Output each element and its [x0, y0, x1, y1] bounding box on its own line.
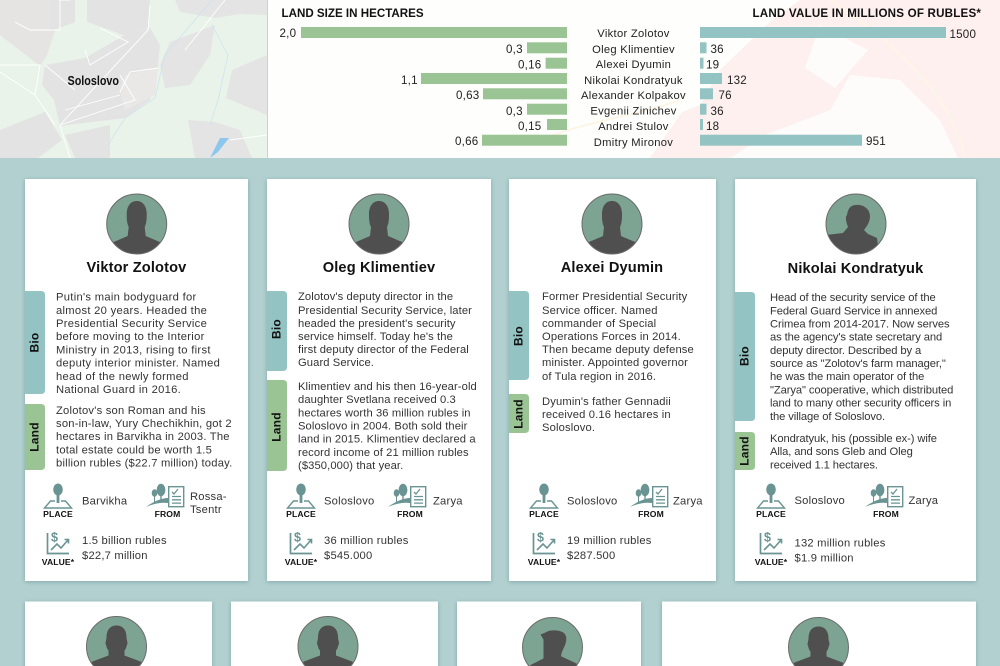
land text: hectares in Barvikha in 2003. The — [56, 431, 230, 443]
panel: chart background — [267, 0, 1000, 158]
land tab: Land — [512, 399, 526, 429]
bio text: Ministry in 2013, rising to first — [56, 344, 211, 356]
portrait — [107, 194, 167, 254]
name: Nikolai Kondratyuk — [788, 261, 924, 277]
row: Kolpakov: 0,63 — [456, 89, 479, 102]
portrait — [826, 194, 886, 254]
from — [865, 484, 939, 519]
from: FROM — [638, 509, 664, 519]
bio tab: Bio — [512, 326, 526, 346]
land text: land in 2015. Klimentiev declared a — [298, 434, 476, 446]
row: Zinichev: Evgenii Zinichev — [590, 106, 677, 118]
portrait — [349, 194, 409, 254]
bio tab: Bio — [270, 319, 284, 339]
from — [388, 484, 463, 519]
land text: total estate could be worth 1.5 — [56, 444, 212, 456]
value: $287.500 — [567, 550, 615, 562]
from: Rossa- — [190, 491, 227, 503]
row: Kondratyuk: 132 — [727, 74, 747, 87]
row: Zolotov: Viktor Zolotov — [597, 28, 670, 40]
bio text: the village of Soloslovo. — [770, 411, 885, 423]
panel: Viktor Zolotov — [25, 179, 248, 581]
land text — [770, 433, 937, 472]
bio text: Then became deputy defense — [542, 344, 694, 356]
bio text: he was the main operator of the — [770, 371, 924, 383]
bio text: of Tula region in 2016. — [542, 371, 656, 383]
row: Dyumin: Alexei Dyumin — [596, 59, 671, 71]
value: VALUE* — [528, 557, 561, 567]
place: Soloslovo — [567, 496, 618, 508]
value: $22,7 million — [82, 550, 148, 562]
bio text: minister. Appointed governor — [542, 357, 688, 369]
value — [42, 530, 167, 567]
land tab — [509, 394, 529, 433]
row: Kondratyuk — [401, 73, 747, 87]
heading: land size: LAND SIZE IN HECTARES — [282, 7, 424, 20]
value: 1.5 billion rubles — [82, 535, 167, 547]
value: VALUE* — [285, 557, 318, 567]
bio text: Head of the security service of the — [770, 292, 936, 304]
bio text: "Zarya" cooperative, which distributed — [770, 384, 953, 396]
place: PLACE — [43, 509, 73, 519]
place: PLACE — [286, 509, 316, 519]
bio text: Putin's main bodyguard for — [56, 292, 197, 304]
panel: bar charts — [280, 7, 981, 149]
land text: ($350,000) that year. — [298, 460, 403, 472]
panel: row 2 card 4 — [662, 602, 976, 666]
land text: Soloslovo in 2004. Both sold their — [298, 420, 468, 432]
portrait — [582, 194, 642, 254]
row: Klimentiev: 36 — [710, 43, 724, 56]
bio tab — [735, 292, 755, 421]
bio text: deputy interior minister. Named — [56, 358, 220, 370]
place: PLACE — [756, 509, 786, 519]
panel: row 2 card 3 — [457, 602, 641, 666]
row: Stulov: Andrei Stulov — [598, 121, 669, 133]
bio tab: Bio — [28, 333, 42, 352]
place: Soloslovo — [324, 496, 374, 508]
land text — [542, 396, 671, 434]
panel: Oleg Klimentiev — [267, 179, 491, 581]
row: Stulov — [518, 119, 719, 133]
bio text: before moving to the Interior — [56, 331, 205, 343]
from: Tsentr — [190, 504, 222, 516]
bio text — [298, 291, 472, 369]
row: Mironov: 951 — [866, 135, 886, 148]
row: Kondratyuk: 1,1 — [401, 74, 418, 87]
bio text: deputy director. Described by a — [770, 345, 922, 357]
bio text: Former Presidential Security — [542, 291, 688, 303]
bio text: Presidential Security Service — [56, 318, 207, 330]
bio text: almost 20 years. Headed the — [56, 305, 207, 317]
from: Zarya — [673, 496, 703, 508]
land text: daughter Svetlana received 0.3 — [298, 394, 456, 406]
row: Mironov: Dmitry Mironov — [594, 137, 673, 149]
row: Mironov: 0,66 — [455, 135, 478, 148]
row: Zinichev: 0,3 — [506, 105, 523, 118]
land tab — [267, 380, 287, 471]
place — [756, 484, 845, 519]
land text: hectares worth 36 million rubles in — [298, 408, 471, 420]
row: Stulov: 18 — [706, 120, 719, 133]
bio text — [542, 291, 694, 383]
land tab: Land — [738, 436, 752, 466]
bio text: Service officer. Named — [542, 305, 658, 317]
bio text: Operations Forces in 2014. — [542, 331, 681, 343]
bio text: as the agency's state secretary and — [770, 332, 942, 344]
from: FROM — [155, 509, 180, 519]
place: Barvikha — [82, 496, 128, 508]
from: FROM — [397, 509, 423, 519]
row: Dyumin: 19 — [706, 58, 719, 72]
bio text — [56, 292, 220, 396]
bio text — [770, 292, 953, 423]
panel: row 2 card 2 — [231, 602, 438, 666]
row: Klimentiev — [506, 42, 724, 56]
value — [755, 530, 886, 567]
row: Mironov — [455, 135, 886, 149]
row: Kolpakov — [456, 88, 732, 102]
row: Dyumin: 0,16 — [518, 58, 541, 72]
land text: son-in-law, Yury Chechikhin, got 2 — [56, 418, 232, 430]
value: VALUE* — [42, 557, 75, 567]
bio text: Presidential Security Service, later — [298, 305, 472, 317]
land text — [298, 381, 477, 472]
land text: Dyumin's father Gennadii — [542, 396, 671, 408]
place: PLACE — [529, 509, 559, 519]
row: Kondratyuk: Nikolai Kondratyuk — [584, 75, 683, 87]
value: VALUE* — [755, 557, 788, 567]
land text: Kondratyuk, his (possible ex-) wife — [770, 433, 937, 445]
row: Dyumin — [518, 58, 719, 72]
bio text: Zolotov's deputy director in the — [298, 291, 453, 303]
place — [529, 484, 618, 519]
panel: row 2 card 1 — [25, 602, 212, 666]
name: Viktor Zolotov — [87, 260, 187, 276]
land text: Zolotov's son Roman and his — [56, 405, 206, 417]
bio text: head of the newly formed — [56, 371, 189, 383]
row: Zolotov: 1500 — [950, 28, 976, 41]
land text: billion rubles ($22.7 million) today. — [56, 458, 232, 470]
row: Zolotov: 2,0 — [280, 27, 296, 40]
row: Klimentiev: 0,3 — [506, 43, 523, 56]
bio text: first deputy director of the Federal — [298, 344, 469, 356]
portrait — [298, 616, 358, 666]
row: Kolpakov: Alexander Kolpakov — [581, 90, 686, 102]
panel: Alexei Dyumin — [509, 179, 716, 581]
bio tab — [509, 291, 529, 380]
portrait — [86, 616, 146, 666]
land tab: Land — [28, 422, 42, 452]
row: Zolotov — [280, 27, 976, 41]
place — [286, 484, 374, 519]
from — [146, 484, 227, 519]
bio text: commander of Special — [542, 318, 656, 330]
bio text: National Guard in 2016. — [56, 384, 181, 396]
row: Kolpakov: 76 — [718, 89, 732, 102]
name: Alexei Dyumin — [561, 260, 663, 276]
bio text: source as "Zolotov's farm manager," — [770, 358, 946, 370]
value — [528, 530, 652, 567]
row: Zinichev: 36 — [710, 105, 724, 118]
panel: Nikolai Kondratyuk — [735, 179, 976, 581]
bio text: Crimea from 2014-2017. Now serves — [770, 318, 950, 330]
bio tab — [267, 291, 287, 371]
value: $1.9 million — [794, 552, 854, 564]
land text: Alla, and sons Gleb and Oleg — [770, 446, 913, 458]
bio text: Guard Service. — [298, 357, 374, 369]
map of Soloslovo — [0, 0, 267, 158]
value: 19 million rubles — [567, 535, 652, 547]
row: Stulov: 0,15 — [518, 120, 541, 133]
land text: record income of 21 million rubles — [298, 447, 469, 459]
bio tab — [25, 291, 45, 394]
heading: land value: LAND VALUE IN MILLIONS OF RUBLES* — [752, 7, 981, 20]
land text: Soloslovo. — [542, 422, 595, 434]
map label: Soloslovo — [68, 73, 119, 88]
row: Zinichev — [506, 104, 724, 118]
land text: Klimentiev and his then 16-year-old — [298, 381, 477, 393]
bio text: service himself. Today he's the — [298, 331, 453, 343]
value: 132 million rubles — [794, 538, 886, 550]
from: Zarya — [433, 496, 463, 508]
name: Oleg Klimentiev — [323, 260, 436, 276]
from — [630, 484, 703, 519]
bio text: headed the president's security — [298, 318, 456, 330]
land text: received 1.1 hectares. — [770, 460, 878, 472]
place — [43, 484, 128, 519]
land text: received 0.16 hectares in — [542, 409, 671, 421]
land tab — [25, 404, 45, 470]
portrait — [788, 618, 848, 666]
from: FROM — [873, 509, 899, 519]
bio text: land to many other security officers in — [770, 398, 951, 410]
portrait — [522, 618, 582, 666]
land text — [56, 405, 232, 470]
land tab — [735, 432, 755, 470]
from: Zarya — [908, 495, 939, 507]
row: Klimentiev: Oleg Klimentiev — [592, 44, 675, 56]
bio tab: Bio — [738, 346, 752, 366]
value: $545.000 — [324, 550, 372, 562]
bio text: Federal Guard Service in annexed — [770, 306, 937, 318]
value — [285, 530, 409, 567]
value: 36 million rubles — [324, 535, 409, 547]
land tab: Land — [270, 412, 284, 442]
place: Soloslovo — [794, 495, 845, 507]
